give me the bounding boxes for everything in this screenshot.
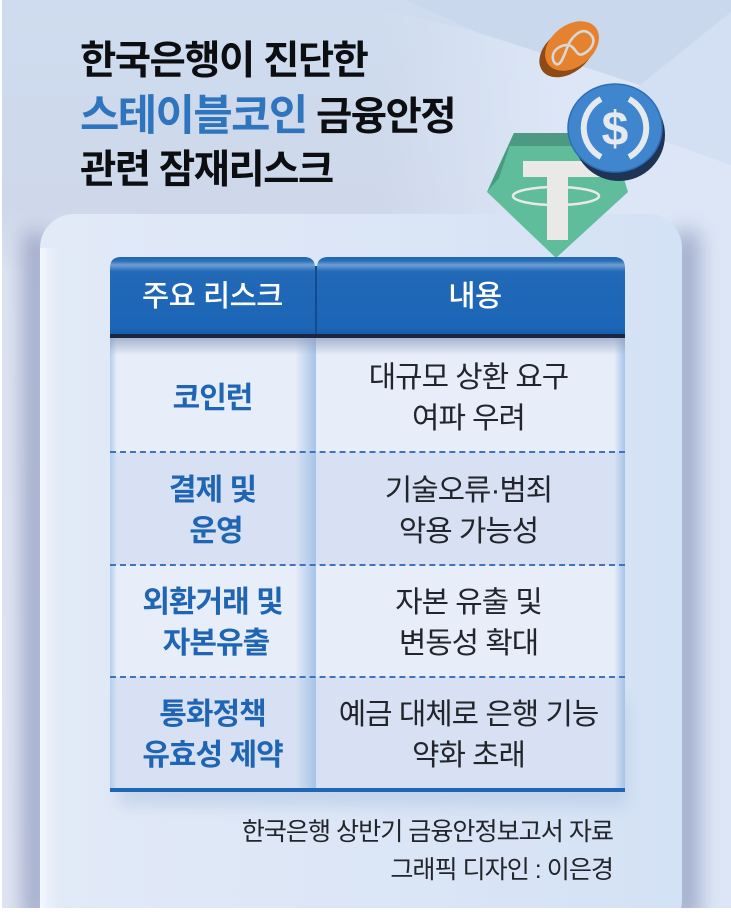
row 3 content (395, 586, 542, 660)
title (80, 39, 455, 192)
row 1 content (369, 361, 568, 435)
row 4 content: 약화 초래 (412, 739, 525, 772)
column header: 내용: 내용 (448, 280, 502, 313)
row 3 label: 외환거래 및 (142, 586, 283, 619)
row 2 content: 악용 가능성 (399, 515, 538, 548)
source credit: 그래픽 디자인 : 이은경 (390, 856, 613, 884)
row 4 label (142, 698, 283, 772)
title: 스테이블코인 금융안정 (80, 92, 455, 140)
icon: tether coin (487, 133, 628, 257)
row 3 content: 자본 유출 및 (395, 586, 542, 619)
row 1 content: 대규모 상환 요구 (369, 361, 568, 394)
row 2 content: 기술오류·범죄 (385, 474, 552, 507)
row 2 label: 결제 및 (169, 474, 256, 507)
title: 관련 잠재리스크 (80, 148, 333, 192)
row 4 content: 예금 대체로 은행 기능 (339, 698, 598, 731)
row 4 label: 통화정책 (159, 698, 266, 731)
title: 한국은행이 진단한 (80, 39, 367, 83)
row 3 label: 자본유출 (163, 627, 269, 660)
row 2 label: 운영 (189, 515, 243, 548)
row 3 content: 변동성 확대 (399, 627, 538, 660)
table header (110, 257, 625, 338)
row 2 content (385, 474, 552, 548)
icon: orange coin (539, 21, 599, 78)
row 1 content: 여파 우려 (412, 402, 525, 435)
panel: main card (40, 214, 682, 915)
column shading (110, 337, 117, 789)
row 2 label (169, 474, 256, 548)
table rows (110, 337, 625, 452)
source credit: 한국은행 상반기 금융안정보고서 자료 (242, 818, 613, 846)
panel side shadows (24, 232, 48, 915)
row 4 content (339, 698, 598, 772)
row 3 label (142, 586, 283, 660)
row 1 label: 코인런 (173, 382, 252, 415)
icon: USDC coin: $ (602, 103, 629, 156)
column header: 주요 리스크: 주요 리스크 (142, 280, 283, 313)
source credit (242, 818, 613, 884)
row 4 label: 유효성 제약 (142, 739, 283, 772)
icon: USDC coin (567, 83, 665, 181)
table shadow (118, 700, 628, 806)
